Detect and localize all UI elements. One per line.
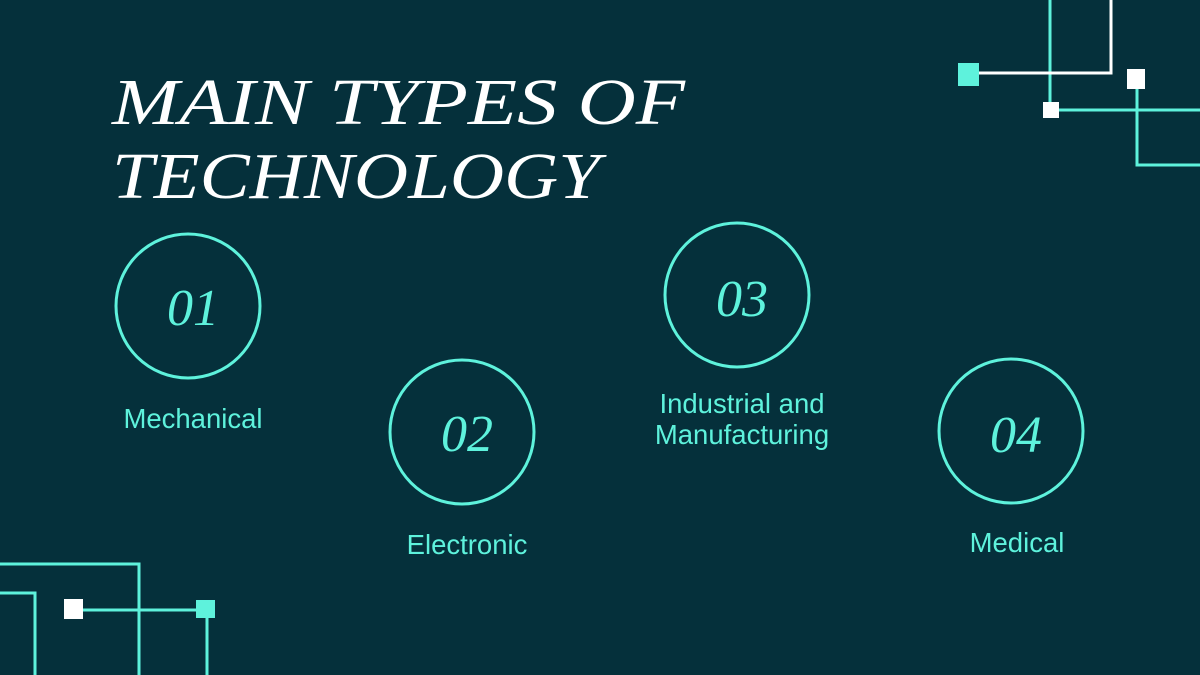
title: TECHNOLOGY [112, 140, 607, 213]
item 01: Mechanical [116, 234, 263, 434]
item 03: Industrial and Manufacturing: Manufacturing [655, 419, 829, 450]
item 03: Industrial and Manufacturing: 03 [716, 271, 768, 328]
title: MAIN TYPES OF [111, 66, 686, 139]
item 04: Medical [939, 359, 1083, 558]
decoration: top-right circuit [958, 0, 1200, 165]
decoration: bottom-left circuit [0, 564, 215, 675]
item 04: Medical: 04 [990, 407, 1042, 464]
item 01: Mechanical: 01 [167, 280, 219, 337]
item 01: Mechanical: Mechanical [123, 403, 263, 434]
item 02: Electronic: Electronic [407, 529, 528, 560]
item 03: Industrial and Manufacturing [655, 223, 829, 450]
title [111, 66, 686, 213]
item 02: Electronic [390, 360, 534, 560]
item 02: Electronic: 02 [441, 406, 493, 463]
item 04: Medical: Medical [970, 527, 1064, 558]
item 03: Industrial and Manufacturing: Industrial and [659, 388, 825, 419]
